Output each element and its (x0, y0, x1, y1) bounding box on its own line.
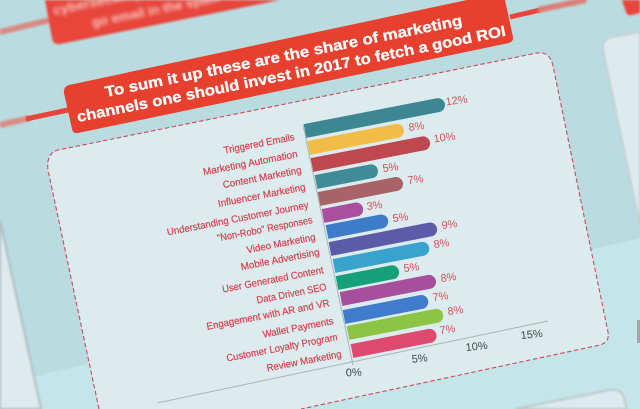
axis tick labels: 0% (346, 367, 362, 379)
icon: edge fragment right (637, 320, 640, 343)
category labels: Engagement with AR and VR (206, 298, 331, 333)
value labels: 7% (432, 290, 450, 304)
value labels: 5% (392, 211, 410, 225)
banner text line 1: To sum it up these are the share of marketing (103, 12, 464, 101)
bar: Content Marketing (311, 135, 431, 172)
value labels: 7% (439, 323, 457, 337)
panel: left neighbour (0, 221, 41, 409)
value labels (366, 94, 469, 337)
bar: Data Driven SEO (336, 264, 400, 290)
bar: Mobile Advertising (329, 221, 438, 256)
category labels: "Non-Robo" Responses (216, 215, 314, 244)
connector: upper left (0, 20, 50, 32)
bar: Triggered Emails (304, 97, 446, 138)
category labels: Triggered Emails (223, 132, 296, 157)
bar: Marketing Automation (307, 123, 405, 155)
category labels: Wallet Payments (262, 316, 335, 341)
value labels: 3% (366, 199, 384, 213)
chart banner (64, 0, 513, 133)
category labels: Content Marketing (222, 165, 303, 191)
bar: Customer Loyalty Program (347, 308, 444, 340)
panel: chart card (48, 53, 608, 409)
panel: right neighbour (603, 32, 640, 226)
value labels: 7% (407, 173, 425, 187)
category labels: Understanding Customer Journey (166, 200, 310, 238)
category labels: Customer Loyalty Program (226, 332, 339, 365)
value labels: 8% (440, 271, 458, 285)
bar: User Generated Content (333, 241, 430, 273)
value labels: 9% (441, 218, 459, 232)
heading: next section banner (622, 0, 640, 15)
category labels: Video Marketing (246, 232, 317, 256)
axis tick labels: 5% (411, 352, 428, 366)
axis tick labels (346, 328, 543, 379)
bar: Video Marketing (326, 213, 389, 239)
category labels: Marketing Automation (202, 149, 299, 178)
category labels: Review Marketing (266, 349, 343, 374)
category labels: Influencer Marketing (217, 182, 307, 210)
bar chart (157, 94, 548, 403)
value labels: 8% (433, 237, 451, 251)
connector: right (510, 0, 586, 17)
value labels: 12% (445, 94, 469, 109)
bar: Wallet Payments (343, 294, 429, 324)
axis tick labels: 15% (520, 328, 543, 342)
value labels: 8% (447, 304, 465, 318)
value labels: 8% (408, 120, 426, 134)
category labels: Mobile Advertising (240, 247, 321, 273)
connector: middle left (0, 110, 68, 125)
banner text line 2: channels one should invest in 2017 to fetch a good ROI (75, 23, 507, 126)
category labels (166, 132, 343, 374)
category labels: User Generated Content (221, 265, 325, 296)
value labels: 10% (433, 131, 457, 146)
value labels: 5% (403, 261, 421, 275)
bar: Engagement with AR and VR (340, 274, 437, 306)
heading: previous section banner (45, 0, 280, 44)
chart axes (157, 125, 548, 403)
bar: Review Marketing (351, 328, 438, 358)
bar: Understanding Customer Journey (318, 176, 404, 206)
value labels: 5% (382, 161, 400, 175)
bar: Influencer Marketing (315, 163, 379, 189)
bar: Non-Robo Responses (322, 201, 364, 223)
category labels: Data Driven SEO (256, 282, 328, 306)
axis tick labels: 10% (465, 340, 488, 354)
panel: bottom neighbour (515, 390, 627, 409)
